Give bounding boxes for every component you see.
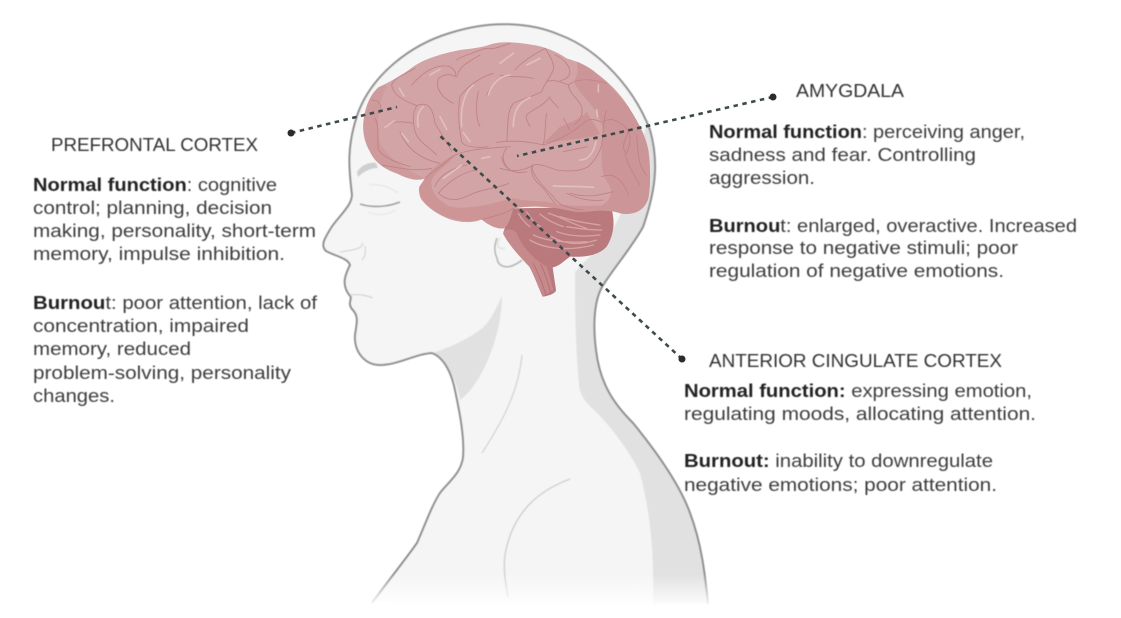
occipital shading bbox=[574, 62, 650, 214]
panel: prefrontal cortex: changes. bbox=[33, 385, 115, 406]
brain bbox=[363, 42, 650, 297]
leader line: anterior cingulate cortex bbox=[438, 134, 686, 362]
nose and mouth bbox=[340, 243, 373, 298]
neck and shoulder lines bbox=[482, 355, 522, 453]
panel: amygdala: sadness and fear. Controlling bbox=[709, 144, 976, 165]
temporal lobe shading bbox=[419, 153, 625, 228]
panel: amygdala: Burnou t: enlarged, overactive. Increased bbox=[709, 215, 1077, 236]
frontal shading bbox=[363, 85, 425, 180]
ear bbox=[495, 238, 522, 267]
back of head shadow bbox=[575, 120, 708, 604]
panel: amygdala: response to negative stimuli; poor bbox=[709, 237, 1018, 258]
panel: prefrontal cortex: making, personality, short-term bbox=[33, 220, 316, 241]
leader line: amygdala bbox=[517, 94, 776, 156]
panel: amygdala: Normal function : perceiving anger, bbox=[709, 121, 1025, 142]
panel: prefrontal cortex: control; planning, decision bbox=[33, 197, 272, 218]
panel: amygdala: AMYGDALA bbox=[796, 80, 905, 101]
panel: prefrontal cortex: Burnou t: poor attention, lack of bbox=[33, 292, 318, 313]
sulci bbox=[372, 43, 647, 219]
leader line: prefrontal cortex bbox=[288, 107, 397, 136]
highlights bbox=[385, 53, 598, 187]
panel: amygdala bbox=[709, 80, 1077, 281]
panel: anterior cingulate cortex: Normal function: expressing emotion, bbox=[684, 380, 1032, 401]
panel: prefrontal cortex: memory, impulse inhibition. bbox=[33, 243, 285, 264]
panel: amygdala: regulation of negative emotions. bbox=[709, 260, 1004, 281]
panel: prefrontal cortex: Normal function : cognitive bbox=[33, 174, 277, 195]
under jaw shadow bbox=[433, 296, 502, 400]
eyebrow bbox=[357, 163, 378, 177]
closed eye bbox=[360, 202, 400, 206]
cerebrum bbox=[363, 42, 650, 228]
panel: anterior cingulate cortex: negative emotions; poor attention. bbox=[684, 474, 997, 495]
panel: prefrontal cortex: concentration, impaired bbox=[33, 315, 249, 336]
head outline bbox=[323, 24, 708, 604]
panel: anterior cingulate cortex: Burnout: inability to downregulate bbox=[684, 450, 993, 471]
bottom fade bbox=[340, 574, 740, 608]
panel: anterior cingulate cortex: regulating moods, allocating attention. bbox=[684, 403, 1036, 424]
panel: anterior cingulate cortex: ANTERIOR CINGULATE CORTEX bbox=[709, 350, 1002, 371]
panel: prefrontal cortex: problem-solving, personality bbox=[33, 362, 292, 383]
panel: prefrontal cortex: memory, reduced bbox=[33, 338, 191, 359]
panel: amygdala: aggression. bbox=[709, 167, 815, 188]
head silhouette bbox=[323, 24, 708, 604]
panel: anterior cingulate cortex bbox=[684, 350, 1036, 495]
panel: prefrontal cortex bbox=[33, 134, 318, 406]
panel: prefrontal cortex: PREFRONTAL CORTEX bbox=[51, 134, 258, 155]
brain stem and cerebellum bbox=[503, 207, 614, 297]
